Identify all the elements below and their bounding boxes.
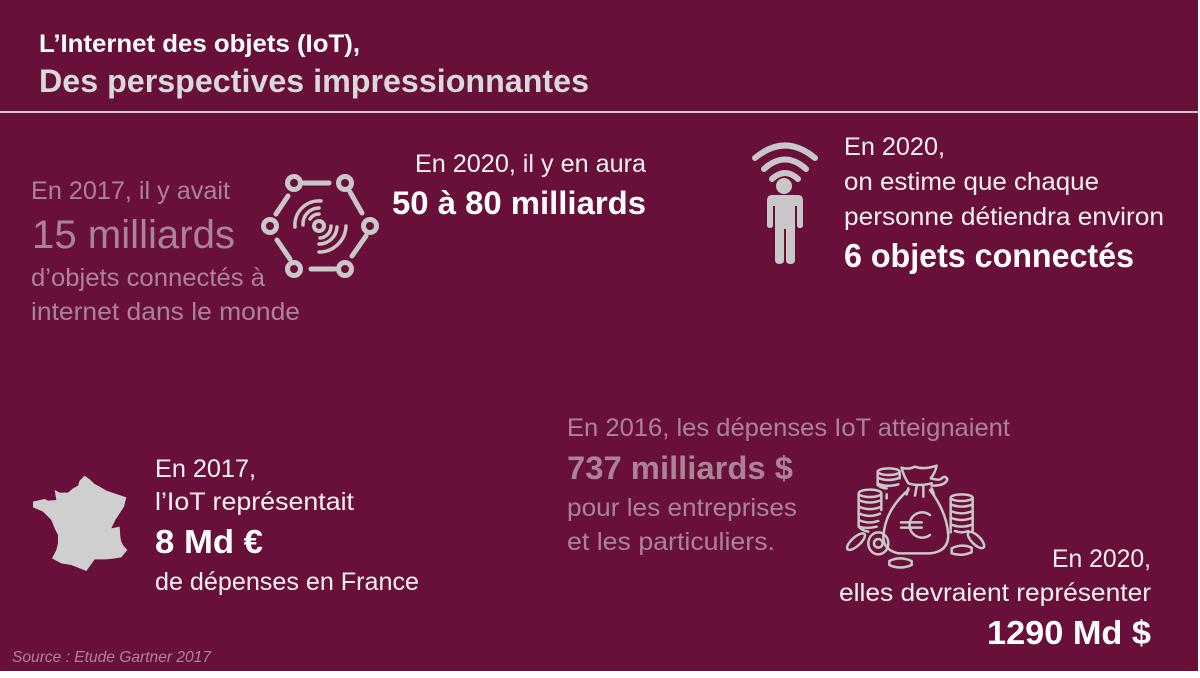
text: France figure: l’IoT représentait — [155, 488, 354, 516]
text: 2017 figure: d’objets connectés à — [31, 264, 265, 292]
text: 2020 projection: En 2020, — [1052, 545, 1151, 573]
text: 2020 projection — [839, 545, 1151, 651]
text: France figure: En 2017, — [155, 455, 256, 483]
title line 1: L’Internet des objets (IoT), — [39, 30, 360, 58]
text: 2020 projection: elles devraient représenter — [839, 579, 1151, 607]
text: 2016 spending: En 2016, les dépenses IoT atteignaient — [567, 414, 1010, 442]
text: per person estimate: personne détiendra environ — [844, 203, 1164, 231]
text: per person estimate: on estime que chaque — [844, 168, 1099, 196]
text: per person estimate: 6 objets connectés — [844, 237, 1134, 274]
icon: connected network — [264, 176, 376, 276]
text: 2016 spending — [567, 414, 1010, 556]
icon: person with wifi — [755, 146, 815, 264]
text: 2020 figure: 50 à 80 milliards — [392, 185, 646, 221]
text: 2016 spending: et les particuliers. — [567, 528, 775, 556]
title line 2: Des perspectives impressionnantes — [39, 63, 589, 99]
text: per person estimate: En 2020, — [844, 133, 945, 161]
panel: objects per person — [755, 133, 1164, 274]
panel: France spending — [33, 455, 419, 596]
icon: map of France — [33, 476, 127, 571]
panel: objects worldwide — [31, 150, 646, 326]
text: 2017 figure: En 2017, il y avait — [31, 177, 230, 205]
panel: IoT spending — [567, 414, 1151, 651]
text: 2016 spending: pour les entreprises — [567, 494, 797, 522]
icon: money bag and coins — [845, 466, 987, 567]
text: 2020 figure: En 2020, il y en aura — [415, 150, 646, 178]
title — [39, 30, 589, 99]
source note: Source : Etude Gartner 2017 — [12, 649, 212, 666]
text: France figure: 8 Md € — [155, 523, 263, 560]
text: 2020 figure — [392, 150, 646, 221]
text: France figure: de dépenses en France — [155, 568, 419, 596]
text: France figure — [155, 455, 419, 596]
text: 2020 projection: 1290 Md $ — [987, 614, 1151, 651]
text: 2016 spending: 737 milliards $ — [567, 450, 793, 486]
text: 2017 figure — [31, 177, 300, 326]
text: 2017 figure: internet dans le monde — [31, 298, 300, 326]
text: per person estimate — [844, 133, 1164, 274]
text: 2017 figure: 15 milliards — [32, 213, 235, 257]
